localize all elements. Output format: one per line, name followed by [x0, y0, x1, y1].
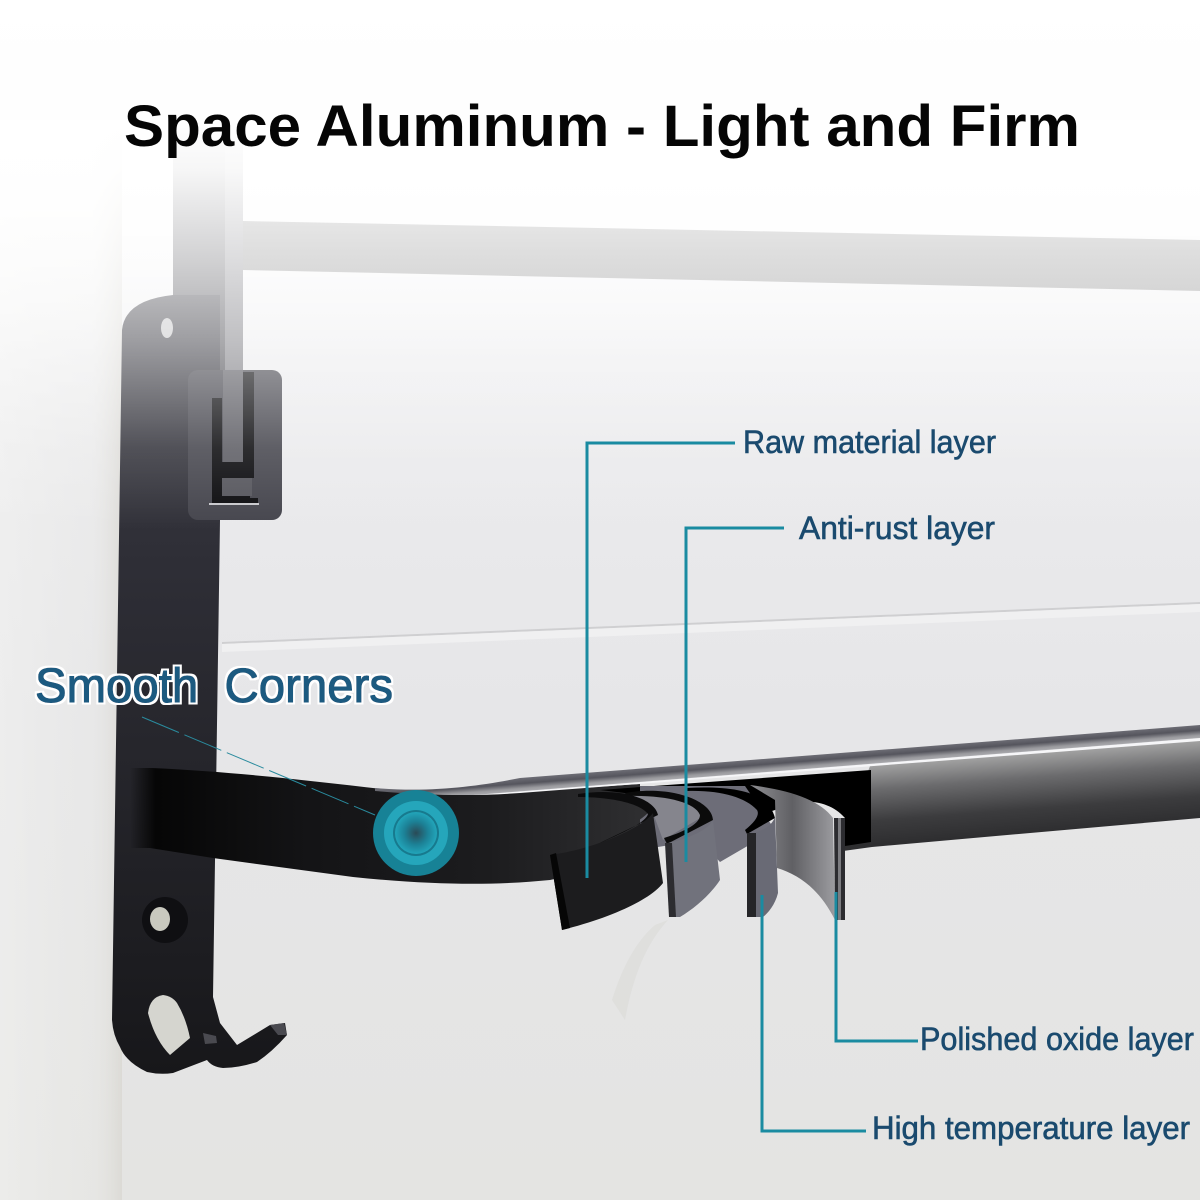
label: high temperature layer: High temperature layer: [872, 1110, 1190, 1146]
high temperature layer: [687, 788, 778, 917]
black recess: [600, 770, 871, 846]
title: Space Aluminum - Light and Firm: [124, 94, 1080, 159]
smooth corners target: [373, 790, 459, 876]
label: anti-rust layer: Anti-rust layer: [799, 510, 995, 546]
upper mounting hole: [161, 318, 173, 338]
label: smooth corners: Smooth Corners: [35, 660, 393, 713]
label: polished oxide layer: Polished oxide layer: [920, 1021, 1194, 1057]
anti-rust layer: [625, 791, 720, 917]
label: raw material layer: Raw material layer: [743, 424, 996, 460]
towel bar: [130, 725, 1200, 884]
raw material layer: [520, 792, 663, 930]
wall plate and hooks: [112, 295, 287, 1074]
right bar segment: [843, 740, 1200, 851]
leader: high temperature layer: [762, 895, 866, 1131]
hook opening: [148, 995, 190, 1055]
top bracket: [188, 370, 282, 520]
lower screw: [142, 897, 188, 943]
bar top rail: [375, 725, 1200, 795]
hook tip highlights: [203, 1023, 287, 1044]
leader: raw material layer: [587, 443, 735, 878]
cut-away layers: [520, 770, 871, 930]
leader: anti-rust layer: [686, 528, 784, 862]
leader: polished oxide layer: [836, 892, 918, 1041]
white top fade: [0, 120, 1200, 530]
polished oxide layer: [750, 785, 845, 920]
layer backing: [640, 786, 775, 862]
plate body: [112, 295, 287, 1074]
vertical post: [173, 120, 243, 420]
background towel rail: [243, 221, 1200, 291]
smooth corners pointer line: [142, 717, 375, 815]
bar body: [130, 768, 640, 884]
